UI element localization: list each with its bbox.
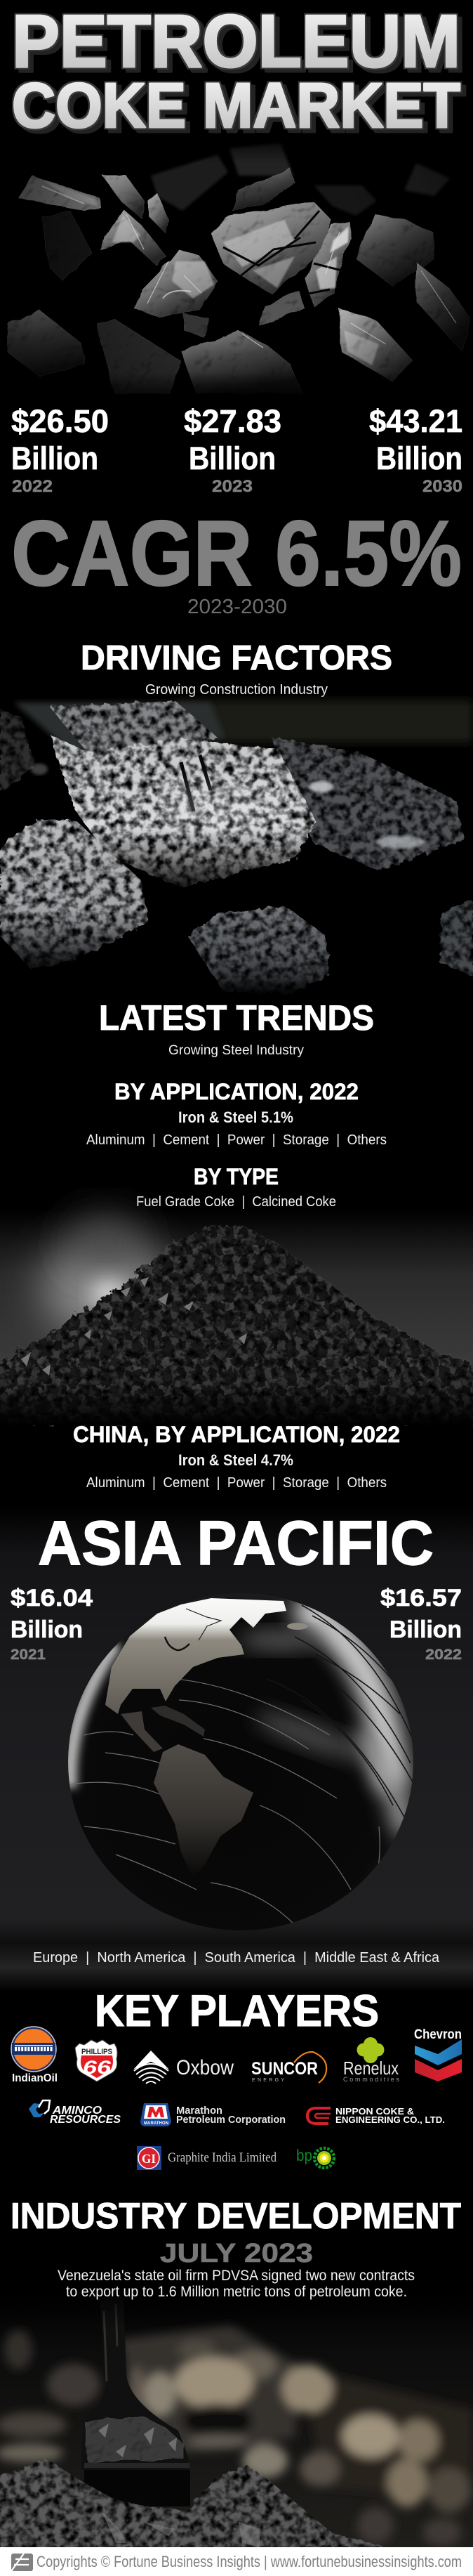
image: coke rock pile xyxy=(0,130,473,404)
segment: by application: BY APPLICATION, 2022 xyxy=(114,1079,359,1104)
logo: Aminco Resources: RESOURCES xyxy=(50,2114,121,2126)
logo: Marathon Petroleum: Petroleum Corporation xyxy=(176,2114,286,2126)
logo: Aminco Resources xyxy=(29,2100,121,2126)
stat: Asia Pacific 2021 xyxy=(11,1585,93,1663)
logo: Oxbow xyxy=(133,2051,234,2084)
stat: 2022 market size: $26.50 xyxy=(11,403,109,439)
segment: by type xyxy=(136,1164,336,1210)
logo: Chevron: Chevron xyxy=(414,2027,462,2042)
stat: Asia Pacific 2022 xyxy=(380,1585,462,1663)
logo: Renelux: Renelux xyxy=(343,2058,399,2079)
image: metallic globe xyxy=(0,1507,473,1992)
segment: by type: Fuel Grade Coke | Calcined Coke xyxy=(136,1194,336,1210)
logo: Aminco Resources: AMINCO xyxy=(52,2105,102,2117)
logo: Oxbow: Oxbow xyxy=(176,2056,234,2079)
logo: Renelux xyxy=(343,2037,400,2083)
stat: 2023 market size: $27.83 xyxy=(184,403,281,439)
heading: key players: KEY PLAYERS xyxy=(95,1987,379,2036)
stat: 2030 market size: 2030 xyxy=(422,477,462,496)
logo: Marathon Petroleum xyxy=(140,2103,286,2126)
logo: Renelux: Commodities xyxy=(343,2076,400,2083)
logo: IndianOil xyxy=(11,2027,58,2084)
development description xyxy=(58,2268,415,2300)
heading: latest trends: Growing Steel Industry xyxy=(168,1043,304,1058)
CAGR: 2023-2030 xyxy=(187,596,287,618)
segment: by application: Aluminum | Cement | Power | Storage | Others xyxy=(86,1132,387,1148)
logo: Phillips 66: PHILLIPS xyxy=(81,2048,112,2056)
stat: Asia Pacific 2021: $16.04 xyxy=(11,1585,93,1611)
segment: by application xyxy=(86,1079,387,1148)
logo: Graphite India: Graphite India Limited xyxy=(168,2150,277,2165)
image: coke mountain xyxy=(0,1210,473,1425)
stat: Asia Pacific 2022: $16.57 xyxy=(380,1585,462,1611)
logo: Suncor: SUNCOR xyxy=(251,2059,318,2079)
logo: IndianOil: IndianOil xyxy=(12,2072,58,2084)
title xyxy=(12,0,460,141)
rock facet highlights xyxy=(42,179,379,365)
logo: Marathon Petroleum: Marathon xyxy=(176,2105,222,2117)
globe continents xyxy=(105,1598,308,1877)
stat: 2023 market size xyxy=(184,403,281,496)
icon: Fortune Business Insights logo xyxy=(11,2554,33,2571)
logo: Suncor xyxy=(251,2052,326,2083)
heading: industry development: INDUSTRY DEVELOPMENT xyxy=(11,2196,461,2237)
heading: latest trends xyxy=(99,998,374,1058)
globe latitude grooves xyxy=(267,1605,414,1819)
stat: 2022 market size xyxy=(11,403,109,496)
logo: Marathon Petroleum: MARATHON xyxy=(144,2121,168,2126)
logo: Nippon Coke xyxy=(307,2106,445,2125)
logo: Nippon Coke: ENGINEERING CO., LTD. xyxy=(335,2114,445,2125)
heading: driving factors: DRIVING FACTORS xyxy=(81,639,392,677)
segment: by application: Iron & Steel 5.1% xyxy=(178,1109,293,1126)
heading: latest trends: LATEST TRENDS xyxy=(99,998,374,1038)
logo: Graphite India xyxy=(137,2146,277,2170)
development description: Venezuela's state oil firm PDVSA signed two new contracts xyxy=(58,2268,415,2284)
segment: by type: BY TYPE xyxy=(194,1164,279,1189)
image: coke with shovel brush xyxy=(0,2287,473,2547)
logo: Chevron xyxy=(414,2027,462,2081)
segment: China by application: CHINA, BY APPLICATION, 2022 xyxy=(73,1422,400,1447)
logo: Phillips 66: 66 xyxy=(83,2057,112,2078)
stat: 2030 market size: Billion xyxy=(376,440,462,476)
segment: China by application: Iron & Steel 4.7% xyxy=(178,1451,293,1469)
logo: Suncor: ENERGY xyxy=(252,2078,284,2083)
stat: 2023 market size: Billion xyxy=(189,440,276,476)
stat: 2030 market size xyxy=(369,403,462,496)
heading: Asia Pacific: ASIA PACIFIC xyxy=(38,1508,434,1578)
date: July 2023: JULY 2023 xyxy=(160,2239,313,2268)
heading: driving factors: Growing Construction Industry xyxy=(145,682,328,698)
stat: 2022 market size: Billion xyxy=(11,440,98,476)
stat: Asia Pacific 2022: Billion xyxy=(389,1616,462,1643)
stat: Asia Pacific 2021: Billion xyxy=(11,1616,83,1643)
logo: bp xyxy=(296,2146,334,2168)
logo: Graphite India: GI xyxy=(142,2152,156,2166)
heading: driving factors xyxy=(81,639,392,698)
stat: 2023 market size: 2023 xyxy=(212,477,253,496)
logo: Phillips 66 xyxy=(75,2040,117,2081)
brush tool xyxy=(81,2297,190,2506)
title: PETROLEUM xyxy=(12,0,460,83)
stat: 2030 market size: $43.21 xyxy=(369,403,462,439)
logo: bp: bp xyxy=(296,2146,312,2164)
title: COKE MARKET xyxy=(12,71,460,141)
image: coal lumps closeup xyxy=(0,700,473,1000)
regions list: Europe | North America | South America | Middle East & Africa xyxy=(33,1950,440,1966)
footer xyxy=(0,2547,473,2576)
stat: 2022 market size: 2022 xyxy=(12,477,53,496)
stat: Asia Pacific 2021: 2021 xyxy=(11,1647,46,1663)
development description: to export up to 1.6 Million metric tons of petroleum coke. xyxy=(66,2284,407,2300)
segment: China by application xyxy=(73,1422,400,1491)
segment: China by application: Aluminum | Cement | Power | Storage | Others xyxy=(86,1475,387,1491)
logo: Nippon Coke: NIPPON COKE & xyxy=(335,2106,414,2117)
stat: Asia Pacific 2022: 2022 xyxy=(425,1647,462,1663)
